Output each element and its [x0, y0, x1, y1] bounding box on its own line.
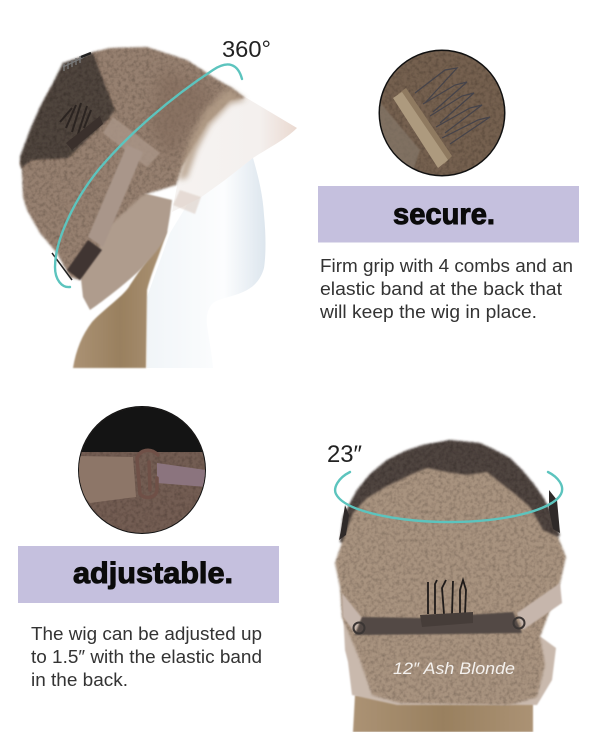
label: length and color: 12″ Ash Blonde	[393, 659, 515, 678]
wig mesh	[335, 468, 566, 705]
text: adjustable description: in the back.	[31, 669, 128, 690]
strap dark	[67, 240, 102, 280]
band: secure: secure.	[393, 198, 495, 231]
hair	[73, 230, 167, 368]
hook	[137, 450, 158, 497]
strap right	[157, 463, 206, 487]
front hairline fade	[178, 88, 246, 180]
strap left	[78, 456, 136, 503]
label: 360: 360°	[222, 36, 271, 62]
small comb at top	[63, 56, 84, 71]
side tabs	[339, 490, 560, 540]
label: 23 inches: 23″	[327, 441, 362, 468]
comb base	[420, 612, 473, 627]
side straps	[342, 583, 562, 633]
comb strip	[398, 88, 452, 164]
text: adjustable description	[31, 623, 262, 690]
text: adjustable description: The wig can be adjusted up	[31, 623, 262, 644]
circle photo: adjustable strap close-up	[78, 405, 208, 535]
comb on panel	[60, 103, 103, 150]
text: secure description	[319, 255, 573, 322]
text: secure description: elastic band at the back that	[320, 278, 562, 299]
dark back panel	[20, 53, 115, 168]
text: secure description: Firm grip with 4 combs and an	[320, 255, 573, 276]
comb teeth	[428, 580, 466, 614]
band: adjustable	[18, 546, 279, 603]
lace front	[172, 86, 297, 212]
outer lace	[343, 610, 556, 705]
strap light	[88, 145, 143, 247]
lace lower band	[80, 193, 172, 310]
text: secure description: will keep the wig in place.	[319, 301, 537, 322]
text: adjustable description: to 1.5″ with the elastic band	[31, 646, 262, 667]
wig cap mesh	[20, 47, 245, 280]
darker mesh near hairline	[150, 70, 215, 160]
mannequin head	[147, 150, 266, 368]
inner lace seam	[103, 117, 160, 167]
dark cap dome	[340, 440, 560, 560]
band: adjustable: adjustable.	[73, 557, 233, 590]
back strap	[355, 612, 522, 635]
arc: 23 inches	[335, 472, 562, 522]
arc: 360 degrees	[55, 64, 242, 287]
photo: wig back view	[327, 440, 566, 732]
comb teeth	[415, 68, 490, 144]
circle photo: comb close-up	[378, 50, 508, 180]
hair	[353, 695, 533, 732]
strap rings	[354, 622, 364, 634]
band: secure	[318, 186, 579, 242]
photo: wig side view on mannequin	[20, 36, 297, 368]
